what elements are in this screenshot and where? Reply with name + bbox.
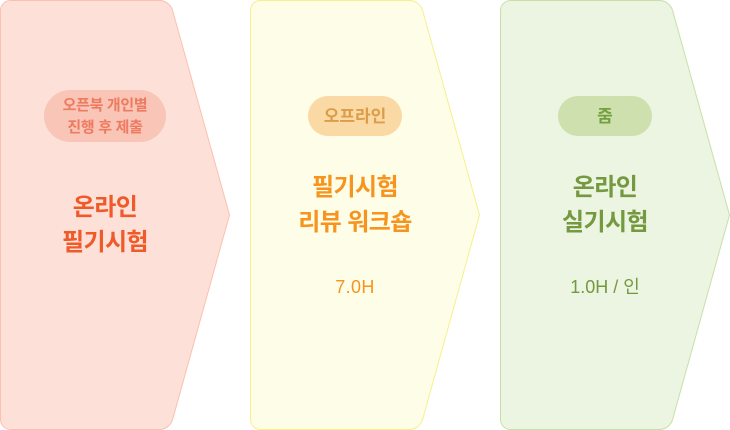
badge: zoom: 줌 bbox=[597, 107, 613, 126]
heading: online practical exam: 온라인 bbox=[573, 174, 637, 201]
badge: offline bbox=[308, 96, 402, 136]
badge: open book: 오픈북 개인별 bbox=[63, 97, 147, 114]
heading: online written exam: 온라인 bbox=[73, 194, 137, 221]
arrow shape: green bbox=[500, 0, 730, 430]
badge: open book: 진행 후 제출 bbox=[67, 119, 143, 136]
panel: workshop bbox=[250, 0, 480, 430]
heading: written exam review workshop bbox=[298, 174, 412, 236]
badge: offline: 오프라인 bbox=[324, 107, 386, 126]
heading: written exam review workshop: 리뷰 워크숍 bbox=[298, 209, 412, 236]
duration: 7.0H: 7.0H bbox=[335, 277, 375, 297]
heading: online practical exam: 실기시험 bbox=[562, 209, 648, 236]
heading: online practical exam bbox=[562, 174, 648, 236]
badge: zoom bbox=[558, 96, 652, 136]
heading: online written exam: 필기시험 bbox=[62, 229, 148, 256]
duration: 1.0H per person: 1.0H / 인 bbox=[570, 277, 640, 297]
panel: online written exam bbox=[0, 0, 230, 430]
heading: written exam review workshop: 필기시험 bbox=[312, 174, 398, 201]
arrow shape: red bbox=[0, 0, 230, 430]
arrow shape: yellow bbox=[250, 0, 480, 430]
badge: open book bbox=[44, 90, 166, 142]
panel: online practical exam bbox=[500, 0, 730, 430]
heading: online written exam bbox=[62, 194, 148, 256]
